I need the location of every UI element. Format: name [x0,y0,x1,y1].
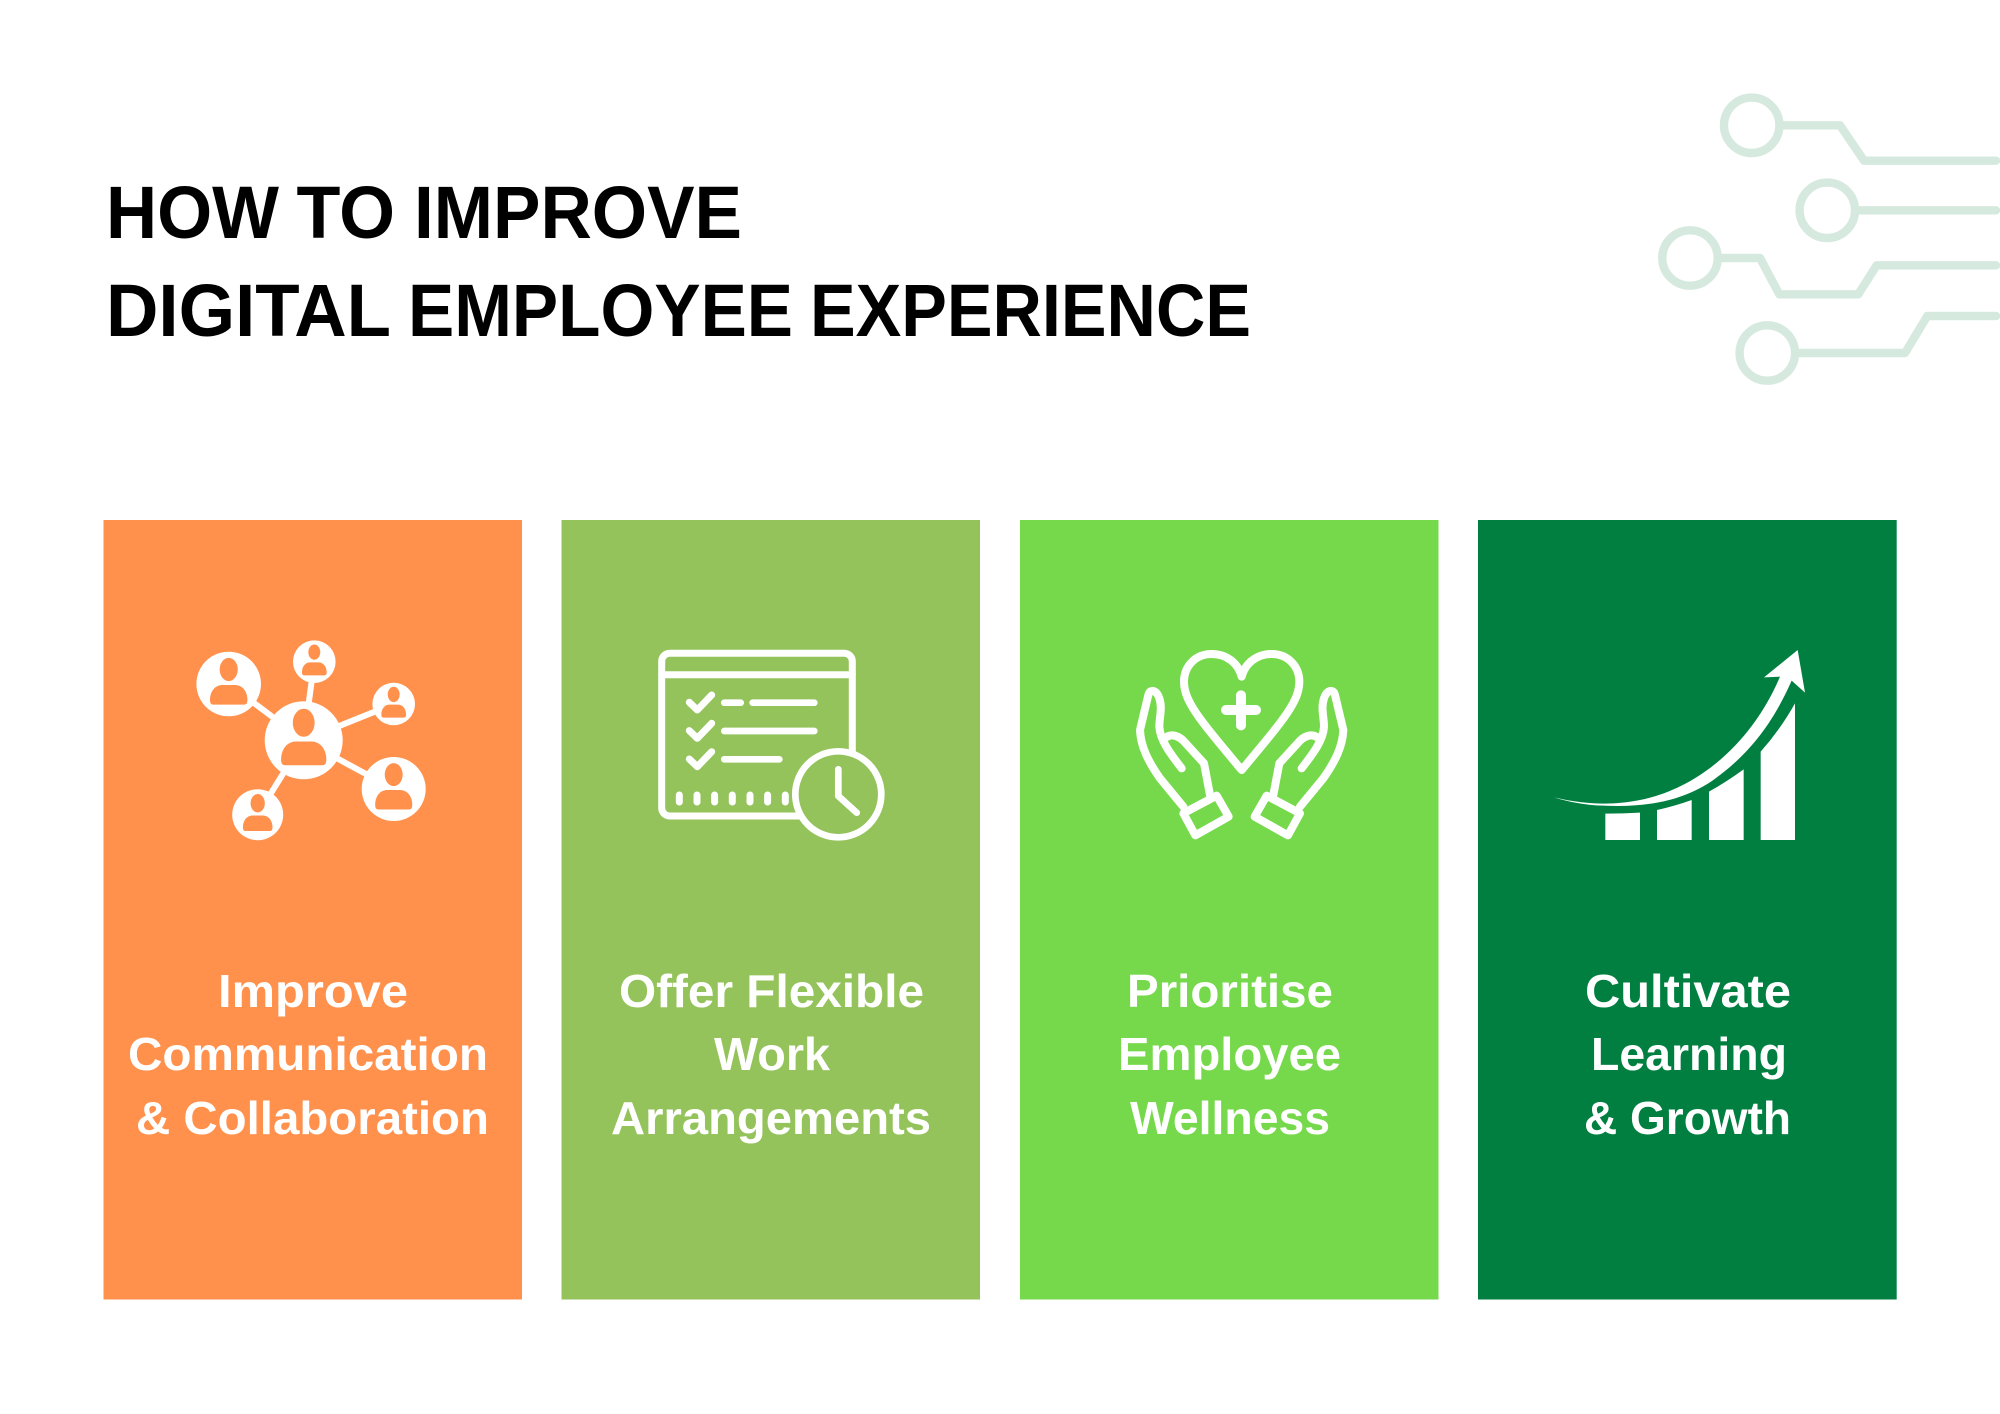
label: prioritise employee wellness: Prioritise [1127,965,1333,1017]
label: offer flexible work arrangements: Work [714,1028,830,1080]
label: offer flexible work arrangements: Arrangements [611,1092,931,1144]
panel: communication and collaboration [104,520,522,1300]
label: cultivate learning and growth: Cultivate [1585,965,1791,1017]
title: EMPLOYEE [408,269,793,352]
label: offer flexible work arrangements [611,965,931,1144]
title: EXPERIENCE [810,269,1251,352]
icon: circuit decoration [1662,98,1996,381]
icon: growth chart with arrow [1554,650,1805,840]
label: offer flexible work arrangements: Offer Flexible [619,965,924,1017]
label: prioritise employee wellness: Wellness [1130,1092,1330,1144]
icon: checklist window with clock [662,653,881,837]
label: cultivate learning and growth: & Growth [1584,1092,1791,1144]
label: prioritise employee wellness: Employee [1118,1028,1341,1080]
icon: hands holding heart [1140,654,1343,835]
icon: connected people network [196,640,426,840]
panel: learning and growth [1478,520,1897,1300]
title [106,171,1251,352]
label: improve communication and collaboration [128,965,489,1144]
title: DIGITAL [106,269,391,352]
title: TO [296,171,395,254]
title: HOW [106,171,279,254]
label: cultivate learning and growth: Learning [1591,1028,1787,1080]
panel: employee wellness [1020,520,1438,1300]
label: improve communication and collaboration: Improve [218,965,408,1017]
label: improve communication and collaboration: Communication [128,1028,488,1080]
label: prioritise employee wellness [1118,965,1341,1144]
label: improve communication and collaboration: & Collaboration [136,1092,489,1144]
label: cultivate learning and growth [1584,965,1791,1144]
panel: flexible work arrangements [562,520,980,1300]
title: IMPROVE [414,171,742,254]
